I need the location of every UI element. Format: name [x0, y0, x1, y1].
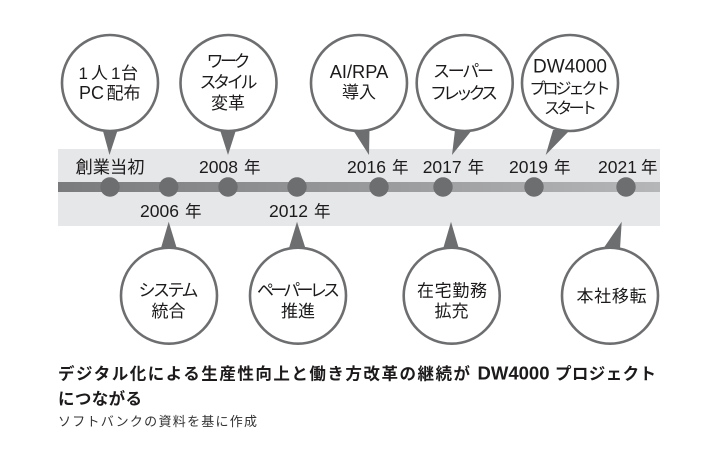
bubble: 本社移転: [562, 222, 658, 344]
year labels: 2006 年: [140, 201, 201, 221]
year labels: 2008 年: [199, 157, 260, 177]
bubble: ペーパーレス推進: ペーパーレス: [257, 281, 340, 300]
timeline bar: [58, 182, 660, 192]
bubble: DW4000プロジェクトスタート: プロジェクト: [530, 80, 610, 98]
bubble: ペーパーレス推進: 推進: [281, 302, 315, 321]
year labels: 2019 年: [509, 157, 570, 177]
bubble: AI/RPA導入: [311, 35, 407, 155]
bubble: AI/RPA導入: AI/RPA: [330, 61, 389, 82]
bubble: スーパーフレックス: [417, 35, 513, 155]
caption heading: [58, 362, 656, 408]
bubble: 1人1台PC配布: PC: [79, 83, 104, 103]
bubble: AI/RPA導入: 導入: [342, 83, 376, 102]
year labels: 2017 年: [423, 157, 484, 177]
bubble: システム統合: [121, 222, 217, 344]
bubble: 在宅勤務拡充: 拡充: [434, 302, 468, 321]
bubble: システム統合: 統合: [152, 302, 186, 321]
panel: timeline band: [58, 149, 660, 226]
bubble: スーパーフレックス: スーパー: [433, 62, 494, 81]
year labels: 2016 年: [347, 157, 408, 177]
bubble: ワークスタイル変革: 変革: [211, 94, 245, 113]
caption heading: デジタル化による生産性向上と働き方改革の継続が: [58, 364, 470, 384]
bubble: DW4000プロジェクトスタート: [522, 35, 618, 155]
bubble: DW4000プロジェクトスタート: スタート: [544, 100, 597, 118]
timeline markers: [100, 177, 636, 197]
bubble: 本社移転: 本社移転: [576, 287, 646, 306]
caption heading: プロジェクト: [555, 364, 656, 384]
caption heading: DW4000: [478, 362, 549, 384]
source note: ソフトバンクの資料を基に作成: [58, 414, 257, 429]
year labels: 創業当初: [76, 158, 144, 177]
bubble: ワークスタイル変革: ワーク: [206, 52, 250, 71]
year labels: 2012 年: [269, 201, 330, 221]
bubble: 1人1台PC配布: [62, 35, 158, 155]
bubble: DW4000プロジェクトスタート: DW4000: [533, 56, 607, 78]
bubble: ペーパーレス推進: [250, 222, 346, 344]
bubble: ワークスタイル変革: スタイル: [200, 73, 258, 92]
caption heading: につながる: [58, 388, 142, 408]
bubble: スーパーフレックス: フレックス: [430, 84, 498, 103]
bubble: システム統合: システム: [138, 281, 198, 300]
bubble: 1人1台PC配布: 配布: [106, 84, 140, 103]
bubble: 在宅勤務拡充: 在宅勤務: [417, 282, 487, 300]
year labels: 2021年: [598, 157, 657, 177]
year labels: [76, 157, 657, 221]
bubble: 1人1台PC配布: 1人1台: [78, 64, 138, 83]
bubble: ワークスタイル変革: [180, 35, 276, 155]
bubble: 在宅勤務拡充: [404, 222, 500, 344]
